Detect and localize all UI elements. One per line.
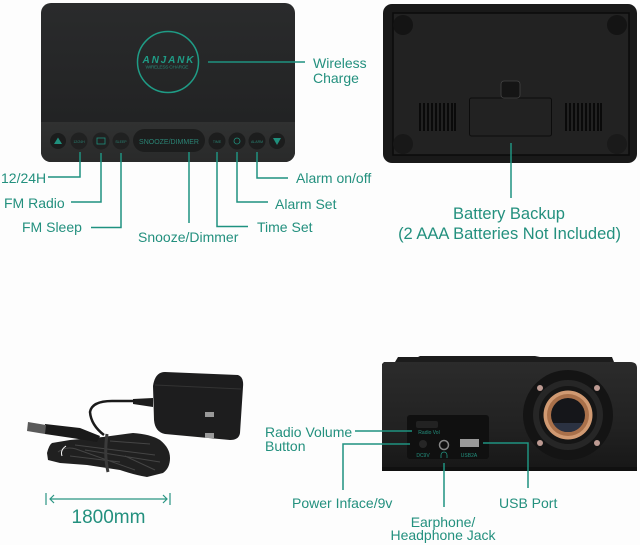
label: Snooze/Dimmer: Snooze/Dimmer <box>138 229 239 245</box>
label: button: Button <box>265 438 305 454</box>
port panel: DC9V <box>416 453 430 459</box>
button strip: 12/24H <box>73 140 85 144</box>
vents left <box>420 103 455 131</box>
port panel: Radio Vol <box>418 430 440 436</box>
label: earphone: Earphone/ <box>411 514 475 530</box>
battery cover <box>470 98 552 136</box>
button strip: SLEEP <box>115 140 127 144</box>
label: wireless charge: Wireless <box>313 55 367 71</box>
wireless charge logo <box>138 32 198 92</box>
wireless charge logo: ANJANK <box>142 55 194 66</box>
label: FM Radio: FM Radio <box>4 195 65 211</box>
button strip: TIME <box>213 140 222 144</box>
label: charge: Charge <box>313 70 359 86</box>
label: 12/24H: 12/24H <box>1 170 46 186</box>
icon: power adapter <box>27 372 243 477</box>
callout lines <box>48 62 528 507</box>
stand clip <box>501 81 520 98</box>
button strip: SNOOZE/DIMMER <box>139 139 199 146</box>
button strip <box>41 122 295 162</box>
label: power inface: Power Inface/9v <box>292 495 392 511</box>
label: Time Set: Time Set <box>257 219 313 235</box>
arrow: 1800mm dimension <box>46 493 170 505</box>
label: radio volume button: Radio Volume <box>265 424 352 440</box>
vents right <box>566 103 601 131</box>
panel: device rear view <box>382 356 637 471</box>
panel: device top view <box>41 3 295 162</box>
label: 1800mm: 1800mm <box>72 507 145 528</box>
label: Alarm Set: Alarm Set <box>275 196 337 212</box>
panel: device bottom view <box>383 4 637 163</box>
label: FM Sleep: FM Sleep <box>22 219 82 235</box>
wireless charge logo: WIRELESS CHARGE <box>146 64 188 70</box>
speaker <box>523 370 613 460</box>
label: USB port: USB Port <box>499 495 557 511</box>
label: batteries not included: (2 AAA Batteries Not Included) <box>398 225 621 243</box>
label: Alarm on/off: Alarm on/off <box>296 170 371 186</box>
label: headphone jack: Headphone Jack <box>390 527 497 543</box>
button strip: ALARM <box>251 140 263 144</box>
port panel: USB2A <box>461 453 478 459</box>
label: battery backup: Battery Backup <box>453 205 565 223</box>
port panel <box>407 415 489 459</box>
